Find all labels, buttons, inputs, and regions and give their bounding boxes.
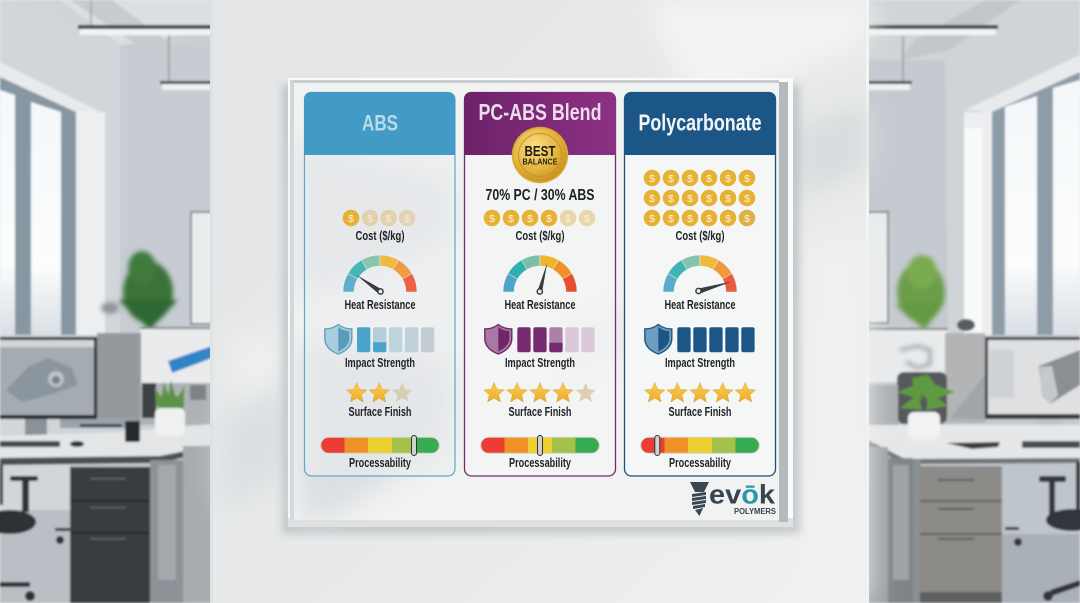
Polycarbonate heat label: Heat Resistance bbox=[664, 298, 736, 312]
background: central wall bbox=[210, 0, 869, 603]
chair left bbox=[0, 465, 70, 601]
ABS cost coins: $ bbox=[348, 213, 354, 225]
Polycarbonate cost coins: $ bbox=[687, 173, 693, 185]
Polycarbonate cost coins: $ bbox=[668, 173, 674, 185]
Polycarbonate cost coins: $ bbox=[687, 193, 693, 205]
Polycarbonate title: Polycarbonate bbox=[638, 110, 762, 136]
chair right bbox=[1005, 462, 1080, 601]
cup and small plant left bbox=[125, 380, 185, 442]
Polycarbonate cost coins: $ bbox=[668, 213, 674, 225]
best balance badge: BEST bbox=[524, 143, 556, 160]
PC-ABS title: PC-ABS Blend bbox=[478, 99, 602, 125]
ABS impact shield and bars bbox=[325, 324, 434, 354]
panel: PC-ABS Blend bbox=[464, 92, 616, 476]
plant right background bbox=[895, 255, 945, 330]
poster frame bbox=[282, 78, 800, 534]
PC-ABS impact shield and bars bbox=[485, 324, 595, 354]
PC-ABS cost coins: $ bbox=[508, 213, 514, 225]
plant left bbox=[101, 251, 178, 330]
ABS header bbox=[304, 92, 455, 155]
drawers left bbox=[70, 467, 150, 603]
background: right office photo bbox=[866, 0, 1080, 603]
monitor left bbox=[0, 337, 97, 435]
Polycarbonate cost coins: $ bbox=[744, 173, 750, 185]
PC-ABS header bbox=[464, 92, 616, 155]
PC-ABS heat label: Heat Resistance bbox=[504, 298, 576, 312]
ABS heat gauge bbox=[343, 255, 417, 294]
ceiling lights left bbox=[78, 0, 212, 90]
Polycarbonate processability bar bbox=[641, 436, 759, 456]
Polycarbonate cost coins: $ bbox=[706, 213, 712, 225]
PC-ABS impact label: Impact Strength bbox=[505, 356, 575, 370]
ABS cost coins: $ bbox=[404, 213, 410, 225]
Polycarbonate impact label: Impact Strength bbox=[665, 356, 735, 370]
panel: Polycarbonate bbox=[624, 92, 776, 476]
ABS cost coins: $ bbox=[367, 213, 373, 225]
Polycarbonate cost coins: $ bbox=[668, 193, 674, 205]
ABS cost label: Cost ($/kg) bbox=[356, 229, 404, 243]
plant and pot right bbox=[897, 375, 955, 440]
monitor right bbox=[985, 337, 1080, 436]
ABS title: ABS bbox=[362, 110, 398, 136]
logo subtitle: POLYMERS bbox=[734, 507, 777, 516]
Polycarbonate heat gauge bbox=[663, 255, 737, 294]
Polycarbonate cost coins: $ bbox=[649, 213, 655, 225]
PC-ABS cost coins: $ bbox=[565, 213, 571, 225]
Polycarbonate cost coins: $ bbox=[706, 193, 712, 205]
PC-ABS processability bar bbox=[481, 436, 599, 456]
Polycarbonate cost coins: $ bbox=[744, 193, 750, 205]
PC-ABS cost coins: $ bbox=[527, 213, 533, 225]
panel: ABS bbox=[304, 92, 455, 476]
PC-ABS surface stars bbox=[484, 382, 596, 402]
Polycarbonate cost coins: $ bbox=[706, 173, 712, 185]
Polycarbonate cost coins: $ bbox=[649, 173, 655, 185]
Polycarbonate cost coins: $ bbox=[687, 213, 693, 225]
Polycarbonate cost label: Cost ($/kg) bbox=[676, 229, 724, 243]
PC-ABS cost coins: $ bbox=[489, 213, 495, 225]
ceiling lights right bbox=[868, 25, 998, 90]
logo wordmark: evōk bbox=[709, 480, 776, 510]
PC-ABS cost coins bbox=[484, 210, 595, 226]
Polycarbonate cost coins bbox=[644, 170, 755, 226]
best balance badge: BALANCE bbox=[522, 156, 558, 166]
Polycarbonate processability label: Processability bbox=[669, 456, 731, 470]
ABS processability bar bbox=[321, 436, 439, 456]
Polycarbonate cost coins: $ bbox=[744, 213, 750, 225]
icon: screw bbox=[690, 482, 709, 516]
ABS processability label: Processability bbox=[349, 456, 411, 470]
logo: evok polymers bbox=[690, 480, 777, 516]
Polycarbonate cost coins: $ bbox=[725, 213, 731, 225]
ABS surface label: Surface Finish bbox=[348, 405, 412, 419]
PC-ABS processability label: Processability bbox=[509, 456, 571, 470]
Polycarbonate cost coins: $ bbox=[725, 193, 731, 205]
Polycarbonate impact shield and bars bbox=[645, 324, 755, 354]
Polycarbonate cost coins: $ bbox=[725, 173, 731, 185]
ABS cost coins: $ bbox=[386, 213, 392, 225]
Polycarbonate surface stars bbox=[644, 382, 756, 402]
Polycarbonate surface label: Surface Finish bbox=[668, 405, 732, 419]
ABS surface stars bbox=[346, 382, 412, 402]
best balance badge bbox=[514, 128, 566, 182]
ABS impact label: Impact Strength bbox=[345, 356, 415, 370]
Polycarbonate header bbox=[624, 92, 776, 155]
PC-ABS heat gauge bbox=[503, 255, 577, 294]
PC-ABS cost coins: $ bbox=[546, 213, 552, 225]
ABS heat label: Heat Resistance bbox=[344, 298, 416, 312]
ABS cost coins bbox=[343, 210, 415, 226]
Polycarbonate cost coins: $ bbox=[649, 193, 655, 205]
PC-ABS cost label: Cost ($/kg) bbox=[516, 229, 564, 243]
PC-ABS cost coins: $ bbox=[584, 213, 590, 225]
PC-ABS surface label: Surface Finish bbox=[508, 405, 572, 419]
blend ratio: 70% PC / 30% ABS bbox=[486, 187, 594, 204]
background: left office photo bbox=[0, 0, 213, 603]
drawers right bbox=[920, 466, 1002, 603]
